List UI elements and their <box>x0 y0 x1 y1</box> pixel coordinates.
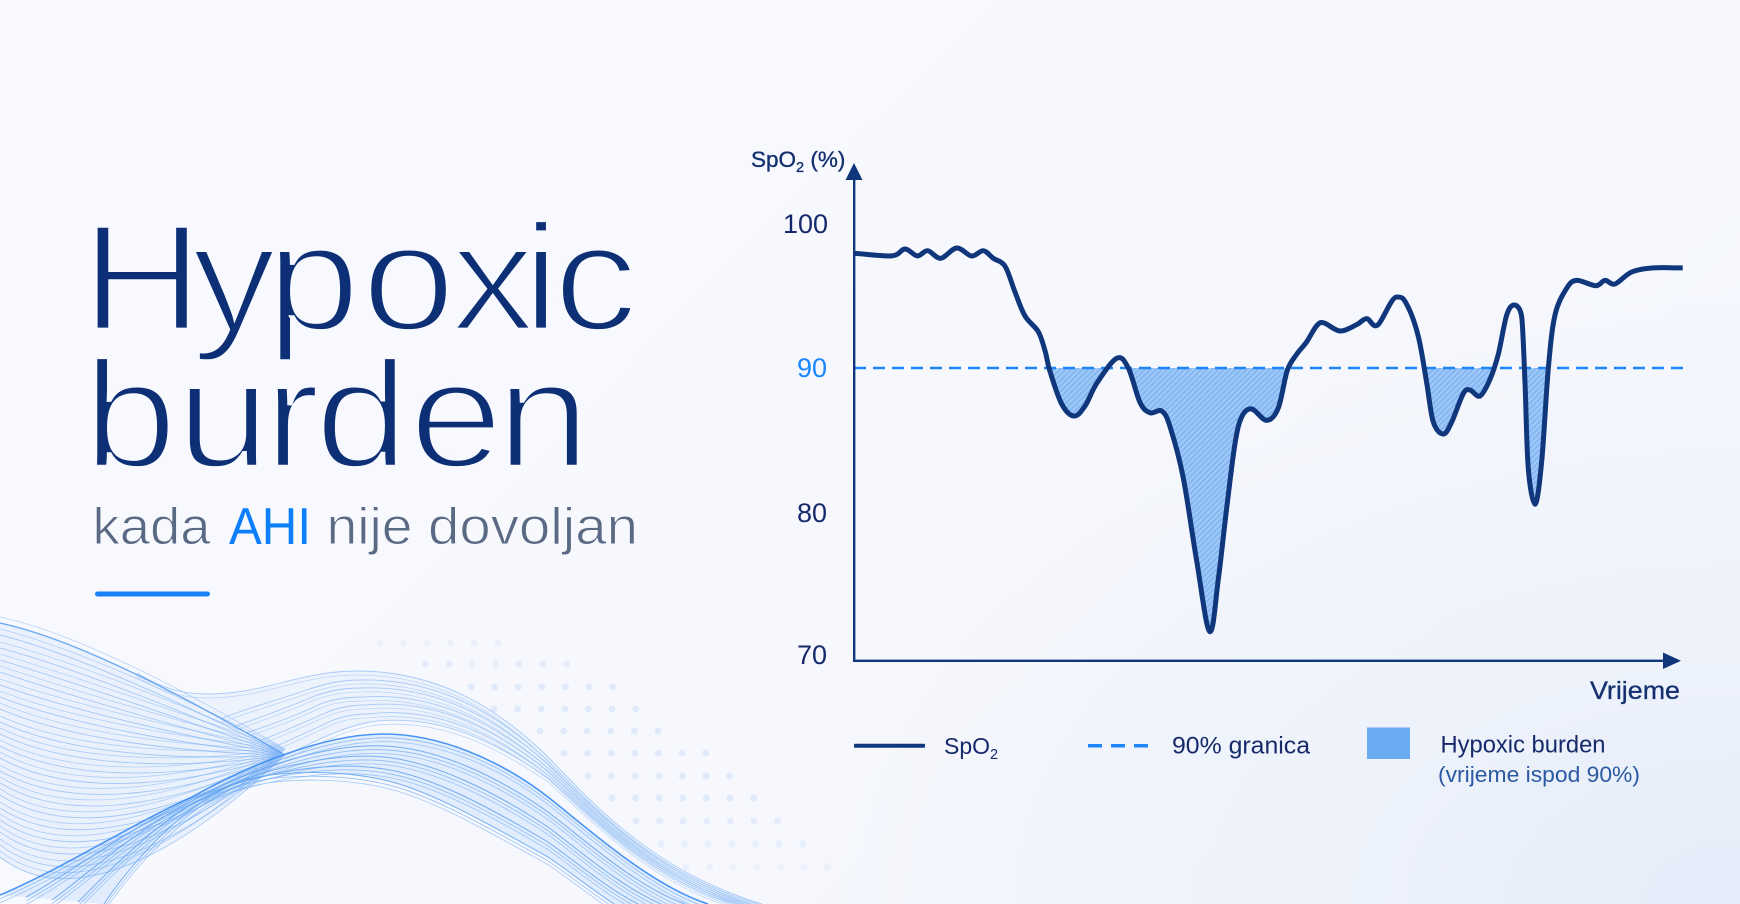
y axis title: 2 <box>796 160 804 176</box>
subtitle: kada <box>92 498 211 556</box>
subtitle: nije <box>326 498 412 556</box>
title: burden <box>83 331 590 500</box>
legend: SpO2 line: 2 <box>990 747 998 763</box>
SpO2 curve <box>854 248 1683 632</box>
subtitle <box>92 498 638 556</box>
90% threshold line <box>854 367 1683 369</box>
subtitle: dovoljan <box>428 498 638 556</box>
legend: hypoxic burden <box>1367 728 1640 787</box>
y tick 80: 80 <box>797 498 827 528</box>
legend: hypoxic burden: (vrijeme ispod 90%) <box>1438 762 1640 787</box>
title <box>81 194 638 500</box>
subtitle: AHI <box>229 498 311 556</box>
y tick 100: 100 <box>783 209 828 239</box>
y axis title: (%) <box>804 147 845 172</box>
decorative wave mesh <box>0 617 762 904</box>
legend: 90% limit: 90% granica <box>1172 732 1311 760</box>
chart: SpO2 over time <box>751 147 1683 705</box>
title: Hypoxic <box>81 194 638 363</box>
legend: SpO2 line: SpO <box>944 733 990 759</box>
hypoxic burden shaded area <box>1052 368 1546 626</box>
x axis with arrow <box>853 652 1681 669</box>
legend: SpO2 line <box>854 733 998 763</box>
y tick 70: 70 <box>797 640 827 670</box>
legend <box>854 728 1640 787</box>
y axis with arrow <box>846 163 862 662</box>
accent rule <box>95 592 210 596</box>
legend: hypoxic burden: Hypoxic burden <box>1440 732 1606 758</box>
x axis title: Vrijeme <box>1590 677 1680 705</box>
y tick 90: 90 <box>797 353 827 383</box>
dot pattern <box>380 643 840 867</box>
y axis title: SpO <box>751 147 796 172</box>
